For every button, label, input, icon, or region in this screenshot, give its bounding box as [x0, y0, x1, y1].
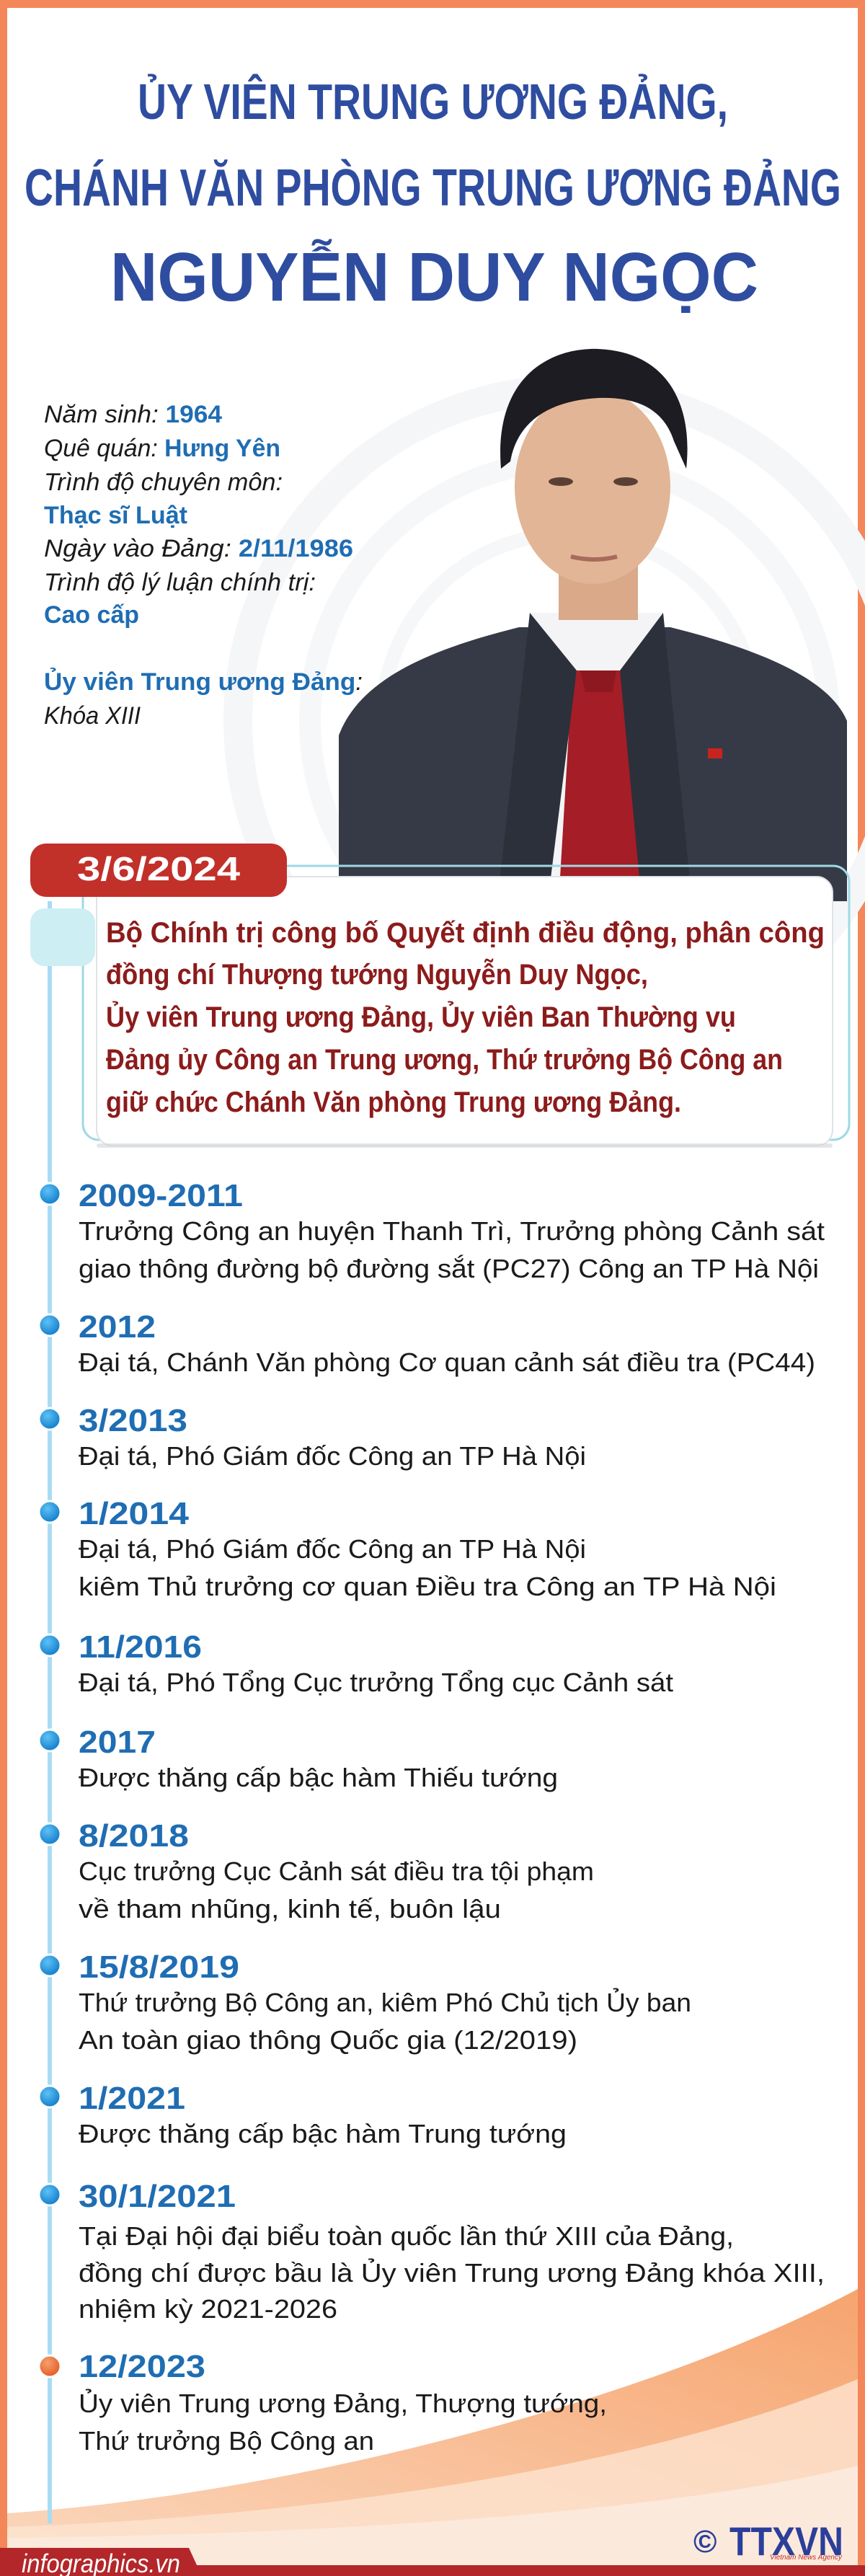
- timeline entry: 11/2016: Đại tá, Phó Tổng Cục trưởng Tổng cục Cảnh sát: [79, 1668, 673, 1697]
- info block: Năm sinh: 1964: [44, 401, 222, 428]
- timeline entry: 15/8/2019: 15/8/2019: [79, 1949, 239, 1985]
- timeline entry: 15/8/2019: An toàn giao thông Quốc gia (12/2019): [79, 2025, 577, 2055]
- logo: TTXVN: ©: [693, 2524, 717, 2559]
- info block: Trình độ chuyên môn:: [44, 469, 283, 496]
- timeline entry: 2017: Được thăng cấp bậc hàm Thiếu tướng: [79, 1763, 558, 1792]
- timeline entry: 2009-2011: Trưởng Công an huyện Thanh Trì, Trưởng phòng Cảnh sát: [79, 1216, 825, 1246]
- timeline entry: 30/1/2021: 30/1/2021: [79, 2179, 236, 2214]
- timeline entry: 2017: 2017: [79, 1725, 156, 1760]
- timeline entry: 15/8/2019: [39, 1949, 691, 2055]
- timeline entry: 12/2023: 12/2023: [79, 2349, 205, 2384]
- timeline entry: 1/2014: [39, 1496, 776, 1601]
- card text: giữ chức Chánh Văn phòng Trung ương Đảng.: [106, 1086, 681, 1118]
- timeline entry: 12/2023: Ủy viên Trung ương Đảng, Thượng tướng,: [79, 2388, 607, 2418]
- timeline entry: 8/2018: Cục trưởng Cục Cảnh sát điều tra tội phạm: [79, 1856, 594, 1886]
- timeline entry: 11/2016: 11/2016: [79, 1629, 202, 1665]
- footer: infographics.vn: [0, 2548, 865, 2576]
- info block: Quê quán: Hưng Yên: [44, 435, 280, 462]
- card text: Bộ Chính trị công bố Quyết định điều động, phân công: [106, 917, 825, 949]
- timeline vertical line: [48, 901, 52, 2523]
- portrait photo: [339, 349, 847, 901]
- bottom orange wave: [7, 2289, 858, 2576]
- title: [25, 73, 841, 316]
- timeline entry: 12/2023: Thứ trưởng Bộ Công an: [79, 2426, 374, 2456]
- timeline entry: 1/2014: kiêm Thủ trưởng cơ quan Điều tra Công an TP Hà Nội: [79, 1572, 776, 1601]
- info block: Khóa XIII: [44, 702, 141, 730]
- title: NGUYỄN DUY NGỌC: [110, 238, 758, 316]
- timeline entry: 1/2021: Được thăng cấp bậc hàm Trung tướng: [79, 2119, 567, 2148]
- timeline entry: 2012: Đại tá, Chánh Văn phòng Cơ quan cảnh sát điều tra (PC44): [79, 1347, 815, 1377]
- timeline entry: 2009-2011: 2009-2011: [79, 1178, 243, 1213]
- timeline entry: 15/8/2019: Thứ trưởng Bộ Công an, kiêm Phó Chủ tịch Ủy ban: [79, 1987, 691, 2017]
- timeline entry: 30/1/2021: đồng chí được bầu là Ủy viên Trung ương Đảng khóa XIII,: [79, 2257, 825, 2288]
- timeline entry: 1/2021: 1/2021: [79, 2081, 185, 2116]
- highlight card: 3/6/2024: [30, 844, 849, 1148]
- card text: [106, 917, 825, 1118]
- timeline entry: 30/1/2021: Tại Đại hội đại biểu toàn quốc lần thứ XIII của Đảng,: [79, 2221, 734, 2251]
- logo: TTXVN: Vietnam News Agency: [770, 2554, 843, 2562]
- info block: Cao cấp: [44, 601, 139, 629]
- timeline entry: 3/2013: Đại tá, Phó Giám đốc Công an TP Hà Nội: [79, 1441, 586, 1471]
- info block: Ngày vào Đảng: 2/11/1986: [44, 535, 353, 562]
- timeline entry: 2012: 2012: [79, 1309, 156, 1345]
- info block: Ủy viên Trung ương Đảng :: [44, 668, 363, 696]
- logo: TTXVN: [693, 2518, 843, 2564]
- card text: Ủy viên Trung ương Đảng, Ủy viên Ban Thường vụ: [106, 1000, 736, 1033]
- info block: Thạc sĩ Luật: [44, 502, 187, 529]
- timeline entry: 8/2018: về tham nhũng, kinh tế, buôn lậu: [79, 1894, 501, 1924]
- timeline entry: 11/2016: [39, 1629, 673, 1697]
- timeline entry: 2009-2011: [39, 1178, 825, 1283]
- timeline entry: 30/1/2021: nhiệm kỳ 2021-2026: [79, 2294, 337, 2324]
- date tab: [30, 844, 287, 897]
- timeline entry: 2012: [39, 1309, 815, 1377]
- title: ỦY VIÊN TRUNG ƯƠNG ĐẢNG,: [138, 73, 728, 130]
- timeline entry: 3/2013: 3/2013: [79, 1403, 187, 1438]
- timeline entry: 1/2014: 1/2014: [79, 1496, 190, 1531]
- info block: Trình độ lý luận chính trị:: [44, 569, 316, 596]
- timeline entry: 1/2014: Đại tá, Phó Giám đốc Công an TP Hà Nội: [79, 1534, 586, 1564]
- timeline entry: 8/2018: 8/2018: [79, 1818, 189, 1854]
- card text: Đảng ủy Công an Trung ương, Thứ trưởng Bộ Công an: [106, 1044, 783, 1076]
- timeline entry: 1/2021: [39, 2081, 567, 2148]
- timeline entry: 12/2023: [39, 2349, 607, 2456]
- timeline entry: 3/2013: [39, 1403, 586, 1471]
- card text: đồng chí Thượng tướng Nguyễn Duy Ngọc,: [106, 957, 648, 991]
- timeline entry: 30/1/2021: [39, 2179, 825, 2324]
- info block: [44, 401, 363, 730]
- timeline entry: 2009-2011: giao thông đường bộ đường sắt (PC27) Công an TP Hà Nội: [79, 1254, 819, 1283]
- date tab: 3/6/2024: [77, 850, 241, 888]
- timeline entry: 8/2018: [39, 1818, 594, 1924]
- logo: TTXVN: TTXVN: [729, 2518, 843, 2564]
- timeline entry: 2017: [39, 1725, 558, 1792]
